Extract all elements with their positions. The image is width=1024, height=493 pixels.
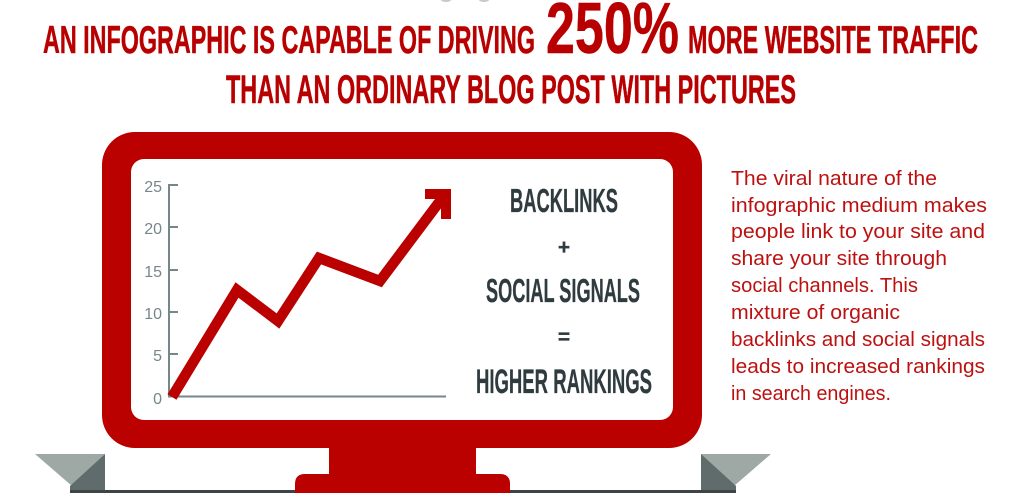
axis labels: 10 xyxy=(144,306,162,323)
formula xyxy=(476,182,652,401)
axis labels: 25 xyxy=(144,179,162,196)
axis labels xyxy=(144,179,162,408)
axis labels: 15 xyxy=(144,264,162,281)
monitor stand xyxy=(295,440,510,493)
backlinks: BACKLINKS xyxy=(510,182,618,219)
rising arrow xyxy=(172,189,451,397)
social signals: SOCIAL SIGNALS xyxy=(486,272,640,309)
monitor xyxy=(102,132,702,493)
description text: in search engines. xyxy=(731,383,891,405)
higher rankings: HIGHER RANKINGS xyxy=(476,363,652,401)
description text: backlinks and social signals xyxy=(731,329,985,351)
description text: people link to your site and xyxy=(731,221,985,243)
description text: The viral nature of the xyxy=(731,168,937,190)
ribbon: left fold xyxy=(35,454,105,490)
line chart xyxy=(144,179,451,408)
axis labels: 20 xyxy=(144,221,162,238)
chart axes xyxy=(169,185,446,396)
headline line 1: AN INFOGRAPHIC IS CAPABLE OF DRIVING xyxy=(43,19,535,62)
monitor screen xyxy=(131,159,673,420)
equals: = xyxy=(558,326,570,349)
plus: + xyxy=(558,236,570,259)
description text: infographic medium makes xyxy=(731,195,987,217)
description text: mixture of organic xyxy=(731,302,900,324)
headline xyxy=(43,0,978,112)
ribbon bar xyxy=(70,490,736,493)
axis labels: 0 xyxy=(153,391,162,408)
description text: social channels. This xyxy=(731,275,918,297)
top cropped marks xyxy=(441,0,489,2)
axis labels: 5 xyxy=(153,348,162,365)
ribbon: right fold xyxy=(701,454,771,490)
monitor frame xyxy=(102,132,702,448)
description text: share your site through xyxy=(731,248,947,270)
headline line 1 xyxy=(43,0,978,69)
description text: leads to increased rankings xyxy=(731,356,985,378)
description text xyxy=(731,168,987,405)
